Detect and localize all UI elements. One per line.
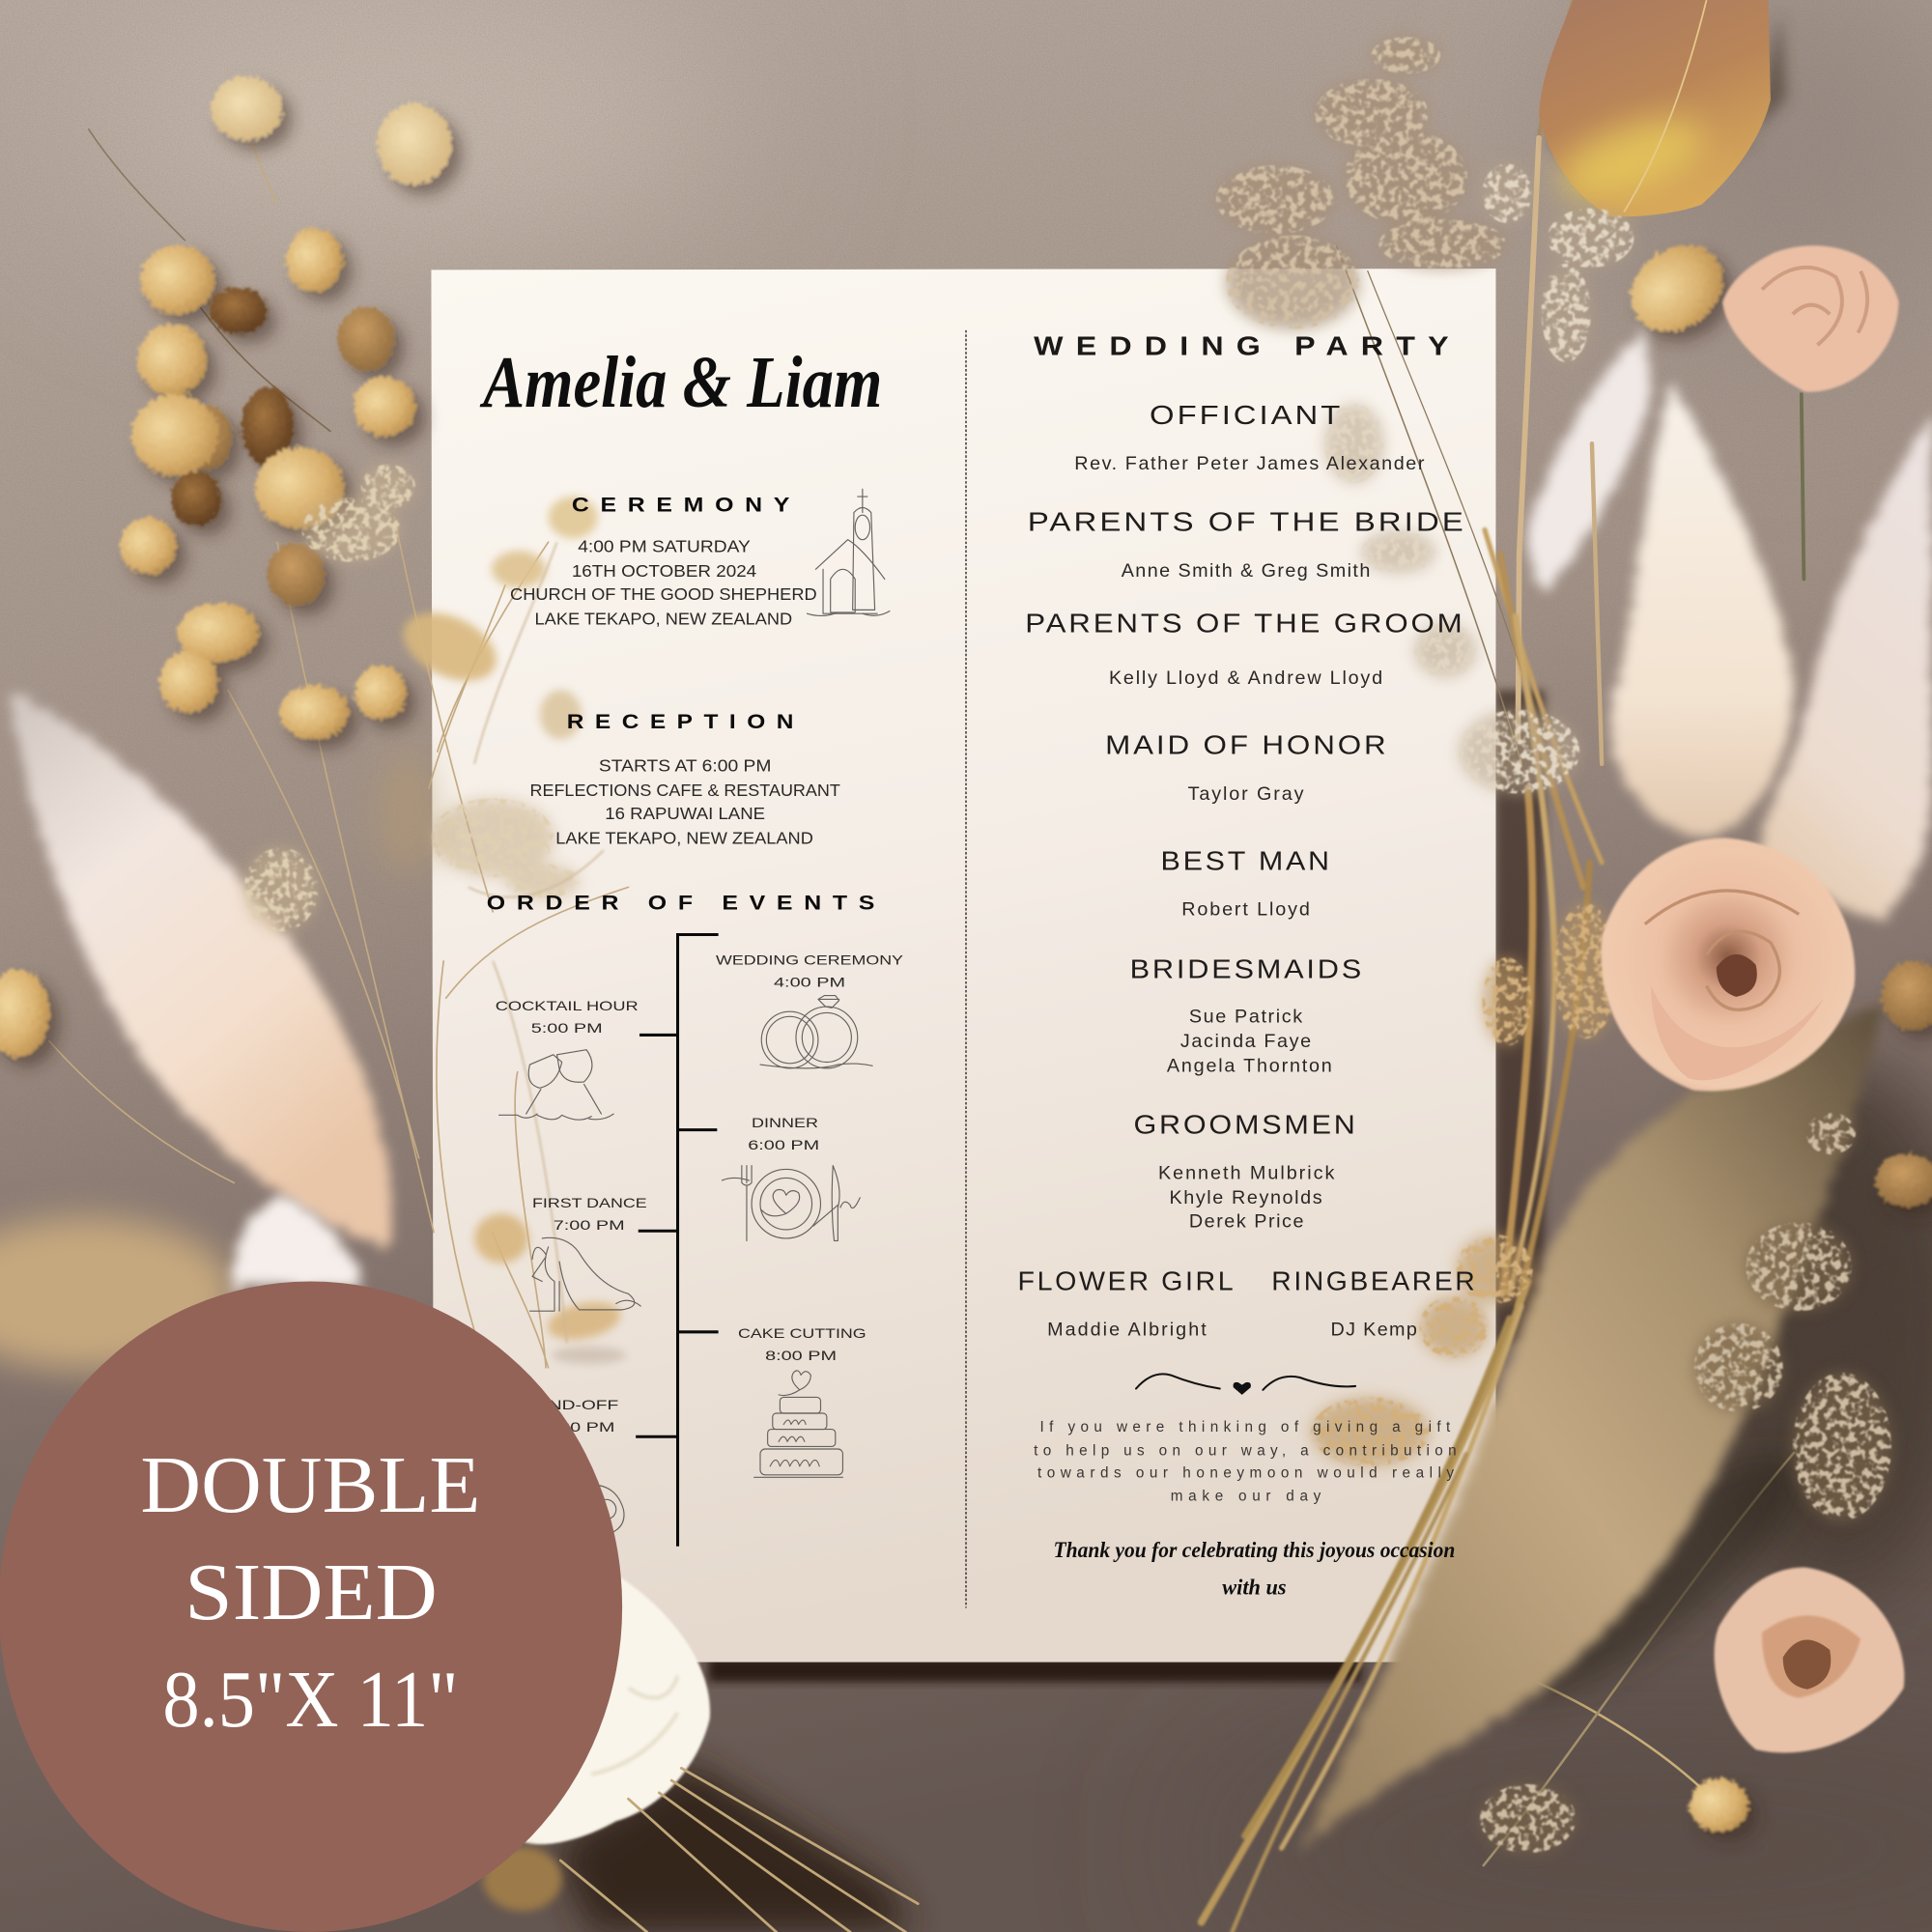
- event: cake cutting: CAKE CUTTING: [738, 1325, 867, 1341]
- groomsmen: GROOMSMEN: [1133, 1109, 1358, 1139]
- best man: Robert Lloyd: [1181, 899, 1310, 921]
- parents of the bride: Anne Smith & Greg Smith: [1122, 560, 1370, 582]
- top leaf: [1539, 0, 1786, 216]
- event: first dance: [529, 1195, 647, 1311]
- right column: wedding party: [1018, 330, 1477, 1600]
- straw bundle at paper edge: [1485, 529, 1602, 1306]
- rose: top right: [1722, 245, 1899, 392]
- event: send-off (partly behind badge): 9:00 PM: [543, 1419, 614, 1435]
- event: cocktail hour: [496, 998, 639, 1120]
- ceremony details: 16TH OCTOBER 2024: [572, 561, 756, 581]
- event: cake cutting: [738, 1325, 867, 1477]
- divider: dotted column rule: [965, 330, 967, 1608]
- event: cake cutting: 8:00 PM: [765, 1348, 837, 1363]
- ceremony details: LAKE TEKAPO, NEW ZEALAND: [535, 610, 792, 629]
- icon: tiered cake: [754, 1371, 842, 1477]
- bridesmaids: [1130, 954, 1364, 1077]
- ceremony details: CHURCH OF THE GOOD SHEPHERD: [510, 584, 817, 604]
- bridesmaids: BRIDESMAIDS: [1130, 954, 1364, 984]
- right pampas plumes: [1528, 327, 1932, 918]
- section: reception: [529, 709, 840, 848]
- badge text: DOUBLE: [140, 1440, 480, 1530]
- title: couple names: Amelia & Liam: [480, 341, 882, 423]
- event: dinner: 6:00 PM: [748, 1137, 819, 1152]
- parents of the groom: Kelly Lloyd & Andrew Lloyd: [1109, 668, 1382, 689]
- ceremony details: [510, 536, 817, 629]
- left feather: pampas plume: [10, 690, 391, 1287]
- baby's breath cluster, upper right: [1216, 37, 1507, 329]
- officiant: [1074, 400, 1425, 474]
- section: ceremony: [510, 492, 817, 629]
- badge text: [140, 1440, 480, 1745]
- left column: [480, 341, 904, 1547]
- event: wedding ceremony: [716, 952, 904, 1068]
- parents of the bride: [1028, 507, 1466, 582]
- reception details: STARTS AT 6:00 PM: [599, 755, 771, 775]
- icon: bridal heels: [529, 1237, 640, 1311]
- flourish with heart: [1136, 1374, 1355, 1395]
- left dried flower balls: [0, 76, 451, 1057]
- flower girl: [1018, 1265, 1236, 1341]
- event: dinner: [722, 1115, 860, 1240]
- reception details: [529, 755, 840, 848]
- yellow dried flower heads, right: [1614, 228, 1932, 1833]
- dried flower at bottom: [483, 1847, 562, 1911]
- best man: BEST MAN: [1161, 846, 1332, 876]
- event: cocktail hour: 5:00 PM: [531, 1020, 603, 1036]
- groomsmen: [1133, 1109, 1358, 1232]
- flower girl: Maddie Albright: [1047, 1320, 1207, 1341]
- badge text: SIDED: [185, 1548, 438, 1637]
- straw bundle lower: [1202, 1282, 1528, 1932]
- paper shadow: [708, 1658, 1361, 1682]
- bottom straw stems: [560, 1768, 918, 1932]
- parents of the groom: PARENTS OF THE GROOM: [1025, 608, 1465, 638]
- gift note: make our day: [1171, 1489, 1321, 1505]
- icon: champagne glasses: [499, 1050, 613, 1120]
- maid of honor: [1105, 730, 1389, 805]
- heading: reception: RECEPTION: [567, 709, 805, 733]
- dark shadow under bottom straws: [554, 1762, 912, 1932]
- gift note: If you were thinking of giving a gift: [1040, 1419, 1451, 1435]
- parents of the groom: [1025, 608, 1465, 689]
- paper: wedding program card: [431, 269, 1495, 1662]
- gift note: towards our honeymoon would really: [1037, 1464, 1454, 1481]
- icon: wedding rings: [760, 996, 872, 1068]
- gift note: [1034, 1419, 1457, 1505]
- event: send-off (partly behind badge): SEND-OFF: [524, 1397, 618, 1412]
- ringbearer: DJ Kemp: [1331, 1320, 1417, 1341]
- badge text: 8.5"X 11": [162, 1655, 458, 1745]
- ringbearer: RINGBEARER: [1271, 1265, 1477, 1295]
- groomsmen: Kenneth Mulbrick: [1158, 1163, 1334, 1184]
- flower girl: FLOWER GIRL: [1018, 1265, 1236, 1295]
- icon: bouquet: [591, 1485, 624, 1538]
- maid of honor: MAID OF HONOR: [1105, 730, 1388, 760]
- badge: double sided size: [0, 1282, 622, 1932]
- heading: wedding party: WEDDING PARTY: [1034, 330, 1462, 360]
- big tan pampas plume: [1298, 1005, 1886, 1852]
- left stems: [49, 129, 629, 1368]
- left tan plume blur: [0, 1217, 234, 1370]
- ringbearer: [1271, 1265, 1477, 1341]
- rose: bottom right: [1715, 1567, 1904, 1752]
- shadow beside right paper edge: [1495, 690, 1545, 1343]
- white flower under the badge: [493, 1567, 710, 1844]
- parents of the bride: PARENTS OF THE BRIDE: [1028, 507, 1466, 537]
- baby's breath, right side: [1311, 164, 1891, 1853]
- event: wedding ceremony: WEDDING CEREMONY: [716, 952, 904, 968]
- event: first dance: FIRST DANCE: [532, 1195, 647, 1210]
- timeline: trunk and branches: [636, 934, 719, 1547]
- gift note: to help us on our way, a contribution: [1034, 1442, 1457, 1459]
- thank you script: with us: [1222, 1576, 1287, 1600]
- dried flowers overlapping the paper, left: [244, 465, 626, 1364]
- bridesmaids: Jacinda Faye: [1180, 1031, 1311, 1052]
- event: send-off (partly behind badge): [524, 1397, 624, 1538]
- reception details: REFLECTIONS CAFE & RESTAURANT: [529, 781, 840, 800]
- event: first dance: 7:00 PM: [554, 1217, 625, 1233]
- heading: ceremony: CEREMONY: [572, 492, 801, 516]
- maid of honor: Taylor Gray: [1188, 783, 1304, 805]
- reception details: LAKE TEKAPO, NEW ZEALAND: [555, 829, 813, 848]
- rose: large centre right: [1601, 838, 1855, 1092]
- icon: plate and cutlery: [722, 1166, 860, 1240]
- officiant: OFFICIANT: [1150, 400, 1343, 430]
- thank you script: Thank you for celebrating this joyous occasion: [1054, 1538, 1455, 1562]
- heading: order of events: ORDER OF EVENTS: [487, 890, 886, 914]
- bridesmaids: Sue Patrick: [1189, 1007, 1302, 1028]
- groomsmen: Khyle Reynolds: [1169, 1187, 1322, 1208]
- event: cocktail hour: COCKTAIL HOUR: [496, 998, 639, 1013]
- icon: church: [807, 489, 890, 615]
- groomsmen: Derek Price: [1189, 1210, 1303, 1232]
- bridesmaids: Angela Thornton: [1167, 1056, 1332, 1077]
- thank you script: [1054, 1538, 1455, 1600]
- event: dinner: DINNER: [752, 1115, 818, 1130]
- ceremony details: 4:00 PM SATURDAY: [578, 536, 751, 555]
- event: wedding ceremony: 4:00 PM: [774, 975, 845, 990]
- shadow below tan plume: [1471, 1420, 1831, 1735]
- officiant: Rev. Father Peter James Alexander: [1074, 453, 1425, 474]
- reception details: 16 RAPUWAI LANE: [605, 804, 765, 823]
- right stems and straw: [1337, 0, 1804, 1865]
- best man: [1161, 846, 1332, 921]
